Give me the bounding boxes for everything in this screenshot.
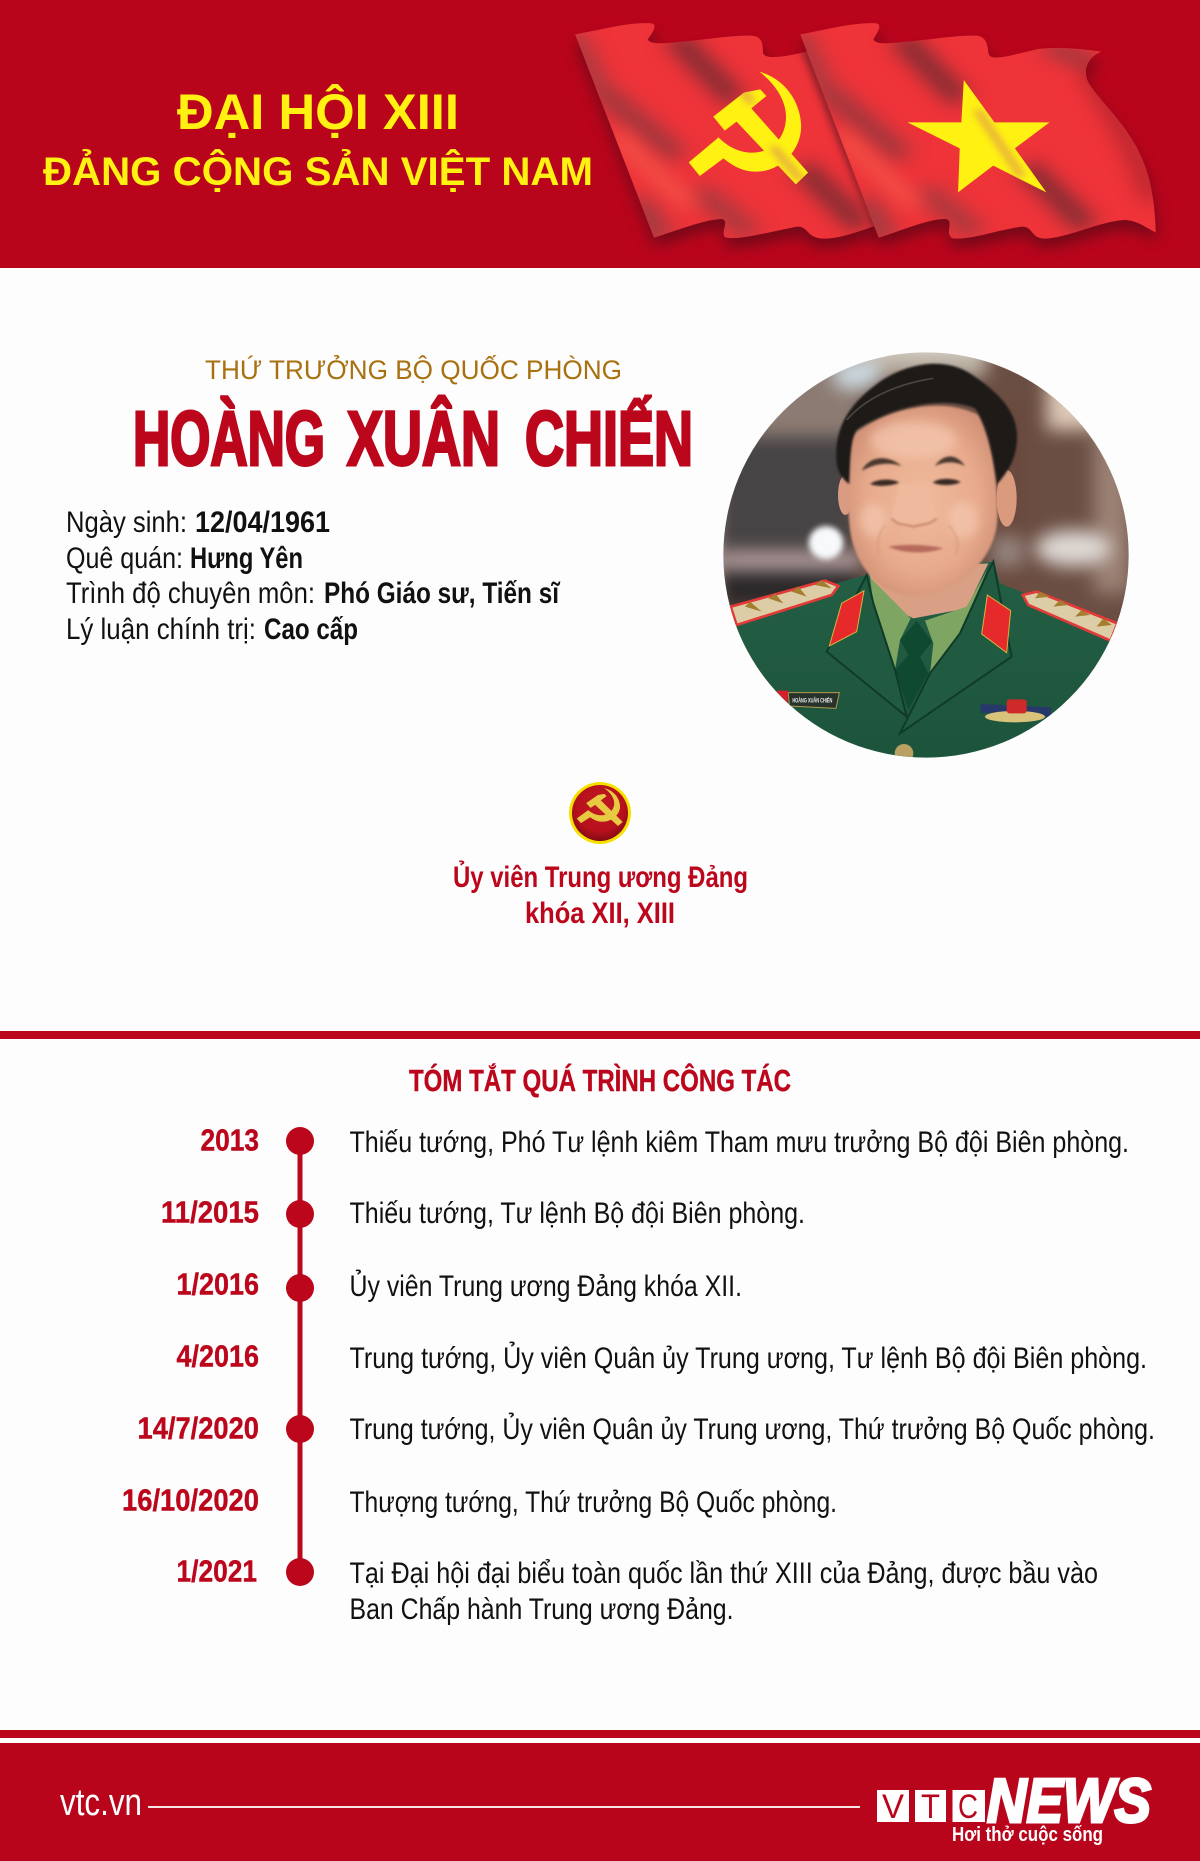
party membership caption [453,860,748,930]
timeline descriptions [350,1126,1155,1626]
timeline descriptions: Thượng tướng, Thứ trưởng Bộ Quốc phòng. [350,1486,837,1519]
timeline dates: 11/2015 [161,1194,259,1230]
logo: VTC News: NEWS [987,1767,1151,1836]
flag: gold star [800,23,1156,239]
timeline dates: 1/2016 [176,1266,259,1302]
right epaulette [1023,592,1117,641]
heading: congress title: ĐẠI HỘI XIII [177,83,459,140]
party emblem icon [569,782,631,844]
logo: VTC News: C [958,1788,978,1826]
logo: VTC News: V [882,1788,904,1826]
personal details [66,506,560,646]
right ear [997,470,1017,527]
timeline descriptions: Ban Chấp hành Trung ương Đảng. [350,1593,734,1626]
left ear [838,476,850,515]
party membership caption: Ủy viên Trung ương Đảng [453,860,748,894]
profile heading [133,355,693,482]
name tag: HOÀNG XUÂN CHIẾN [792,697,832,704]
icon: waving party and national flags [570,23,1165,254]
timeline dates: 14/7/2020 [138,1410,259,1446]
education [66,577,560,610]
bokeh light [809,526,843,559]
section heading: work history: TÓM TẮT QUÁ TRÌNH CÔNG TÁC [409,1062,791,1098]
flag shadow [576,32,1157,248]
timeline dates: 16/10/2020 [122,1482,259,1518]
hammer and sickle emblem [688,72,808,184]
jacket button [894,744,914,758]
person name: XUÂN [347,395,500,482]
person name [133,395,693,482]
shirt collar [870,569,987,673]
smile lines [878,526,958,550]
hometown: Quê quán: [66,542,183,575]
timeline dates [122,1122,259,1588]
political theory: Cao cấp [264,613,358,646]
heading: congress title [43,83,593,194]
birth date: 12/04/1961 [195,506,330,539]
timeline [122,1122,1155,1626]
hometown: Hưng Yên [190,542,303,575]
military badge [981,699,1051,722]
neck [868,563,988,618]
footer [0,1743,1200,1861]
party membership caption: khóa XII, XIII [525,897,675,930]
person name: CHIẾN [525,395,693,482]
cheek highlights [860,422,978,538]
website: vtc.vn [60,1782,142,1824]
timeline descriptions: Thiếu tướng, Tư lệnh Bộ đội Biên phòng. [350,1197,805,1230]
job title: THỨ TRƯỞNG BỘ QUỐC PHÒNG [205,355,622,385]
mouth [888,545,943,552]
red collar tabs [829,591,864,646]
header banner [0,0,1200,268]
portrait photo [723,352,1129,758]
logo: VTC News: T [921,1788,940,1826]
necktie [895,621,932,710]
blurred background [713,347,1147,680]
timeline axis [298,1141,302,1572]
political theory: Lý luận chính trị: [66,613,256,646]
eyes [870,479,961,486]
logo: VTC News: Hơi thở cuộc sống [952,1824,1103,1846]
timeline dots [286,1127,314,1586]
timeline dates: 4/2016 [176,1338,259,1374]
uniform jacket [734,562,1114,758]
birth date: Ngày sinh: [66,506,187,539]
jacket lapels [827,562,1012,733]
gold star [908,80,1050,192]
eyebrows [862,456,965,471]
person name: HOÀNG [133,395,325,482]
education: Trình độ chuyên môn: [66,577,315,610]
hometown [66,542,303,575]
timeline descriptions: Ủy viên Trung ương Đảng khóa XII. [350,1269,742,1303]
birth date [66,506,330,539]
timeline dates: 1/2021 [176,1554,257,1588]
left epaulette [731,580,838,625]
education: Phó Giáo sư, Tiến sĩ [324,577,560,610]
face [848,406,997,596]
timeline dates: 2013 [200,1122,259,1158]
flag: hammer and sickle [575,23,878,239]
heading: congress title: ĐẢNG CỘNG SẢN VIỆT NAM [43,149,593,194]
name tag [776,691,839,708]
logo: VTC News [877,1767,1151,1846]
hair [836,364,1017,484]
nose [891,502,938,528]
